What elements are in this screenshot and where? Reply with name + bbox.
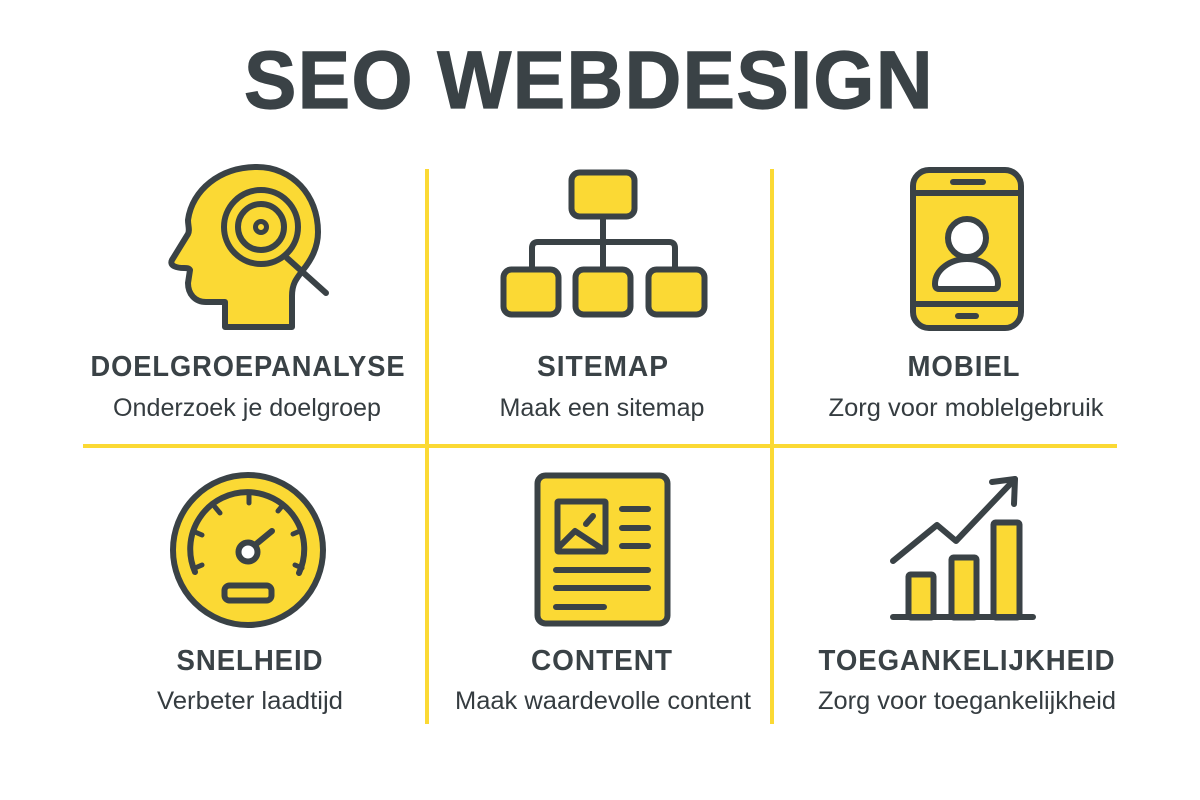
panel: toegankelijkheid [818,479,1116,715]
text: Maak een sitemap [500,394,704,422]
panel: mobiel [828,170,1104,422]
icon: document with picture [538,476,668,624]
panel: content [455,476,751,715]
heading: TOEGANKELIJKHEID [818,645,1116,677]
heading: CONTENT [531,645,673,677]
heading: SNELHEID [176,645,324,677]
icon: phone with user [913,170,1021,328]
text: Maak waardevolle content [455,687,751,715]
panel: doelgroepanalyse [90,167,406,422]
panel: sitemap [500,172,704,422]
icon: speedometer [173,475,323,625]
panel: snelheid [157,475,343,715]
icon: head with target [171,167,326,327]
icon: sitemap tree [504,172,704,314]
text: Verbeter laadtijd [157,687,343,715]
text: Zorg voor moblelgebruik [828,394,1104,422]
icon: growth chart [893,479,1033,618]
title: SEO WEBDESIGN [244,35,934,126]
text: Onderzoek je doelgroep [113,394,381,422]
heading: DOELGROEPANALYSE [90,351,406,383]
heading: SITEMAP [537,351,669,383]
heading: MOBIEL [908,351,1020,383]
text: Zorg voor toegankelijkheid [818,687,1116,715]
